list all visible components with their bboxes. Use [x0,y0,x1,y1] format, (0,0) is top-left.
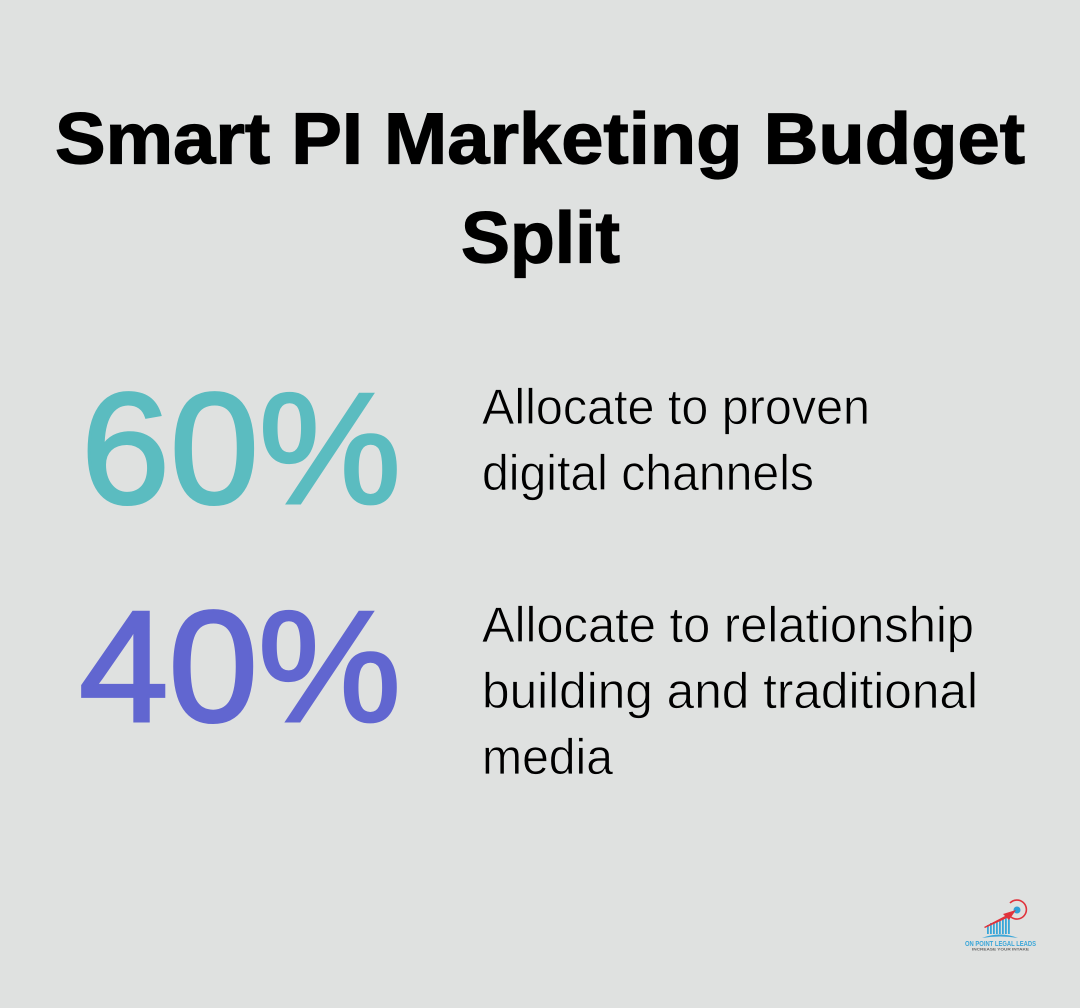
icon: target [1010,900,1026,919]
stat: 40%: 40% [79,579,401,755]
description: digital channels: Allocate to proven [482,379,870,435]
logo tagline: INCREASE YOUR INTAKE [972,948,1029,952]
description: digital channels [482,379,870,501]
icon: bar chart [982,918,1018,938]
description: relationship building [482,597,978,785]
description: digital channels: digital channels [482,445,814,501]
title: Split [461,198,620,278]
title: Smart PI Marketing Budget [55,100,1025,180]
description: relationship building: building and traditional [482,663,978,719]
logo: On Point Legal Leads [965,900,1036,952]
icon: arrow [984,910,1016,928]
description: relationship building: media [482,729,613,785]
title [55,100,1025,278]
stat: 60%: 60% [81,361,401,537]
logo name: ON POINT LEGAL LEADS [965,941,1036,948]
description: relationship building: Allocate to relationship [482,597,974,653]
